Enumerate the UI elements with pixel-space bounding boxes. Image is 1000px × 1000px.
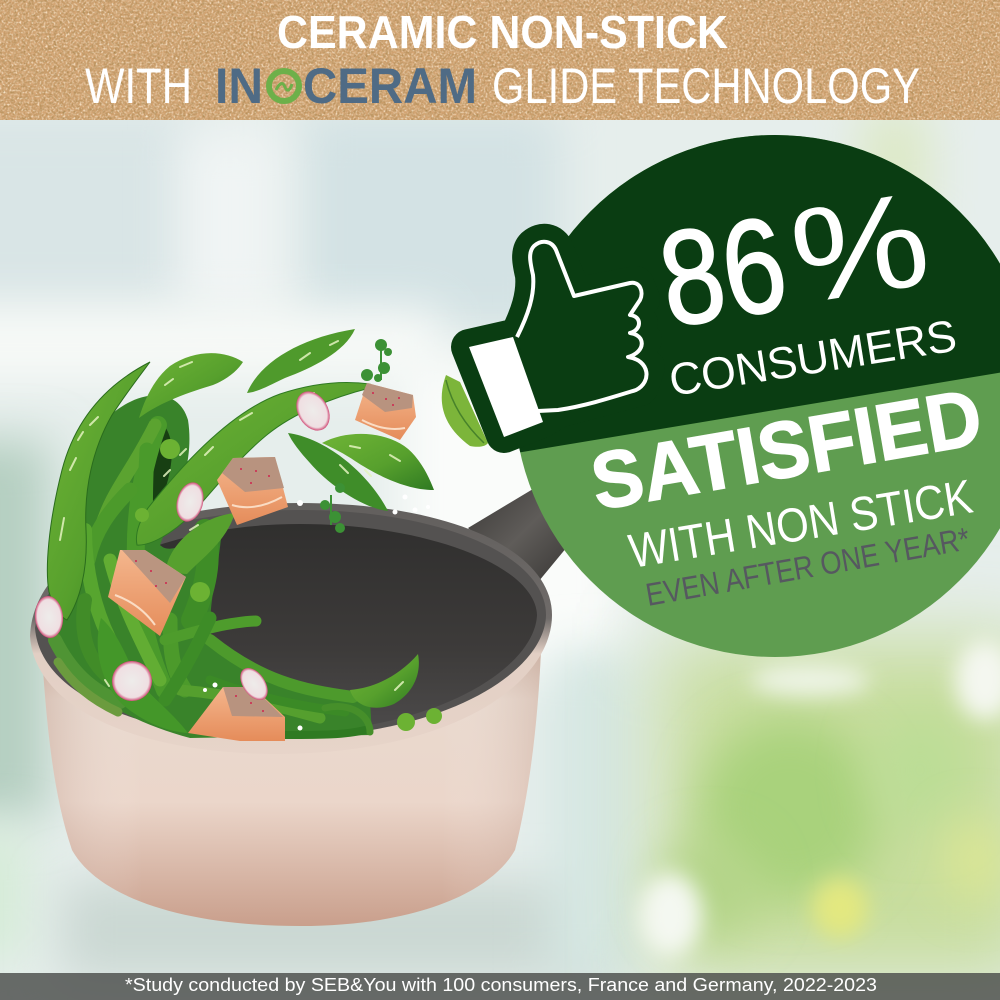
CONSUMERS label: CONSUMERS <box>666 310 960 406</box>
salmon cube B <box>217 457 288 525</box>
heading line 2: WITH <box>85 58 192 114</box>
badge upper segment <box>519 135 1000 452</box>
green bean strands <box>55 425 370 735</box>
salmon cube A <box>355 383 416 440</box>
pod: upper flying <box>247 329 355 393</box>
salt specks <box>203 494 430 730</box>
pod: lower left <box>98 618 188 733</box>
SATISFIED label: SATISFIED <box>585 372 988 527</box>
saucepan <box>30 489 567 926</box>
pan inner wall <box>35 510 546 738</box>
green bean backing mass <box>50 395 372 738</box>
parsley sprigs <box>320 339 392 533</box>
pod: right slim <box>288 433 388 511</box>
dark gap between beans <box>150 420 172 505</box>
header band: kraft paper <box>0 0 1000 120</box>
pan body <box>43 650 541 926</box>
logo: Inoceram: IN <box>215 58 263 114</box>
badge lower segment <box>514 135 1000 657</box>
footer note bar: *Study conducted by SEB&You with 100 consumers, France and Germany, 2022-2023 <box>125 975 877 995</box>
basil leaf <box>442 375 488 447</box>
salmon cube D <box>188 687 285 741</box>
peas <box>135 439 442 731</box>
pan cooking surface <box>52 524 537 734</box>
thumb cuff <box>469 337 543 437</box>
heading line 1: CERAMIC NON-STICK <box>277 6 728 58</box>
percent sign: % <box>781 164 939 333</box>
footer note bar <box>0 973 1000 1000</box>
salmon cube C <box>108 550 186 636</box>
pod: long central <box>136 382 370 545</box>
radish slices <box>33 385 336 705</box>
food: peas, beans, salmon and radish <box>33 329 488 741</box>
pod: under salmon <box>167 513 235 574</box>
pod: big left <box>47 362 150 620</box>
pan handle <box>468 489 567 587</box>
icon: thumbs up <box>469 242 647 437</box>
heading line 2 <box>85 58 920 114</box>
logo: Inoceram <box>215 58 477 114</box>
pan rim <box>30 503 552 754</box>
pod highlights <box>60 341 403 696</box>
badge: satisfaction circle <box>519 135 1000 657</box>
heading line 2: GLIDE TECHNOLOGY <box>492 58 920 114</box>
pod: right wide <box>322 434 434 490</box>
pod: lower right <box>350 654 419 708</box>
logo: Inoceram: CERAM <box>303 58 477 114</box>
86 figure: 86 <box>650 189 796 356</box>
pod: top <box>139 353 243 418</box>
